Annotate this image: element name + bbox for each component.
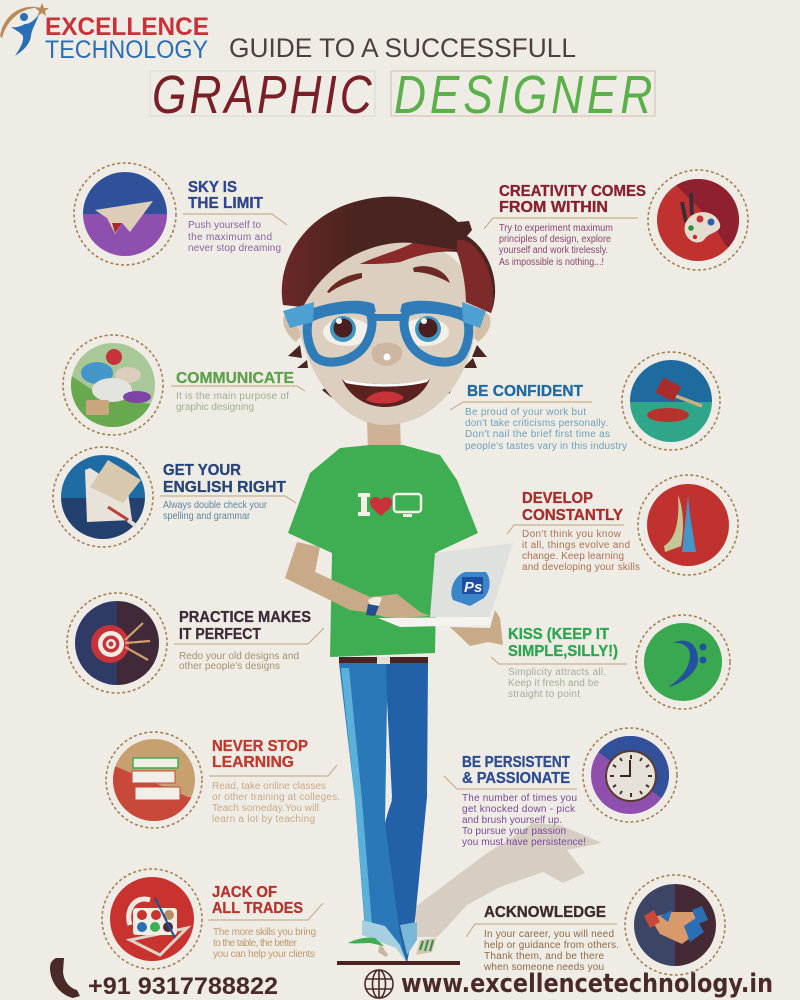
panel: acknowledge: help or guidance from others. — [484, 940, 619, 951]
panel: kiss — [491, 615, 730, 709]
arm and hand — [285, 542, 430, 618]
panel: creativity comes from within — [484, 170, 748, 270]
glasses — [283, 301, 486, 362]
hair side tufts — [288, 345, 487, 398]
panel: kiss: straight to point — [508, 689, 580, 700]
panel: develop constantly: change. Keep learning — [522, 551, 624, 562]
icon: palette and tools — [102, 869, 202, 969]
title — [150, 33, 655, 125]
t-shirt — [288, 445, 478, 657]
shadow of character — [415, 823, 602, 937]
panel: be persistent and passionate — [444, 728, 677, 848]
panel: sky is the limit: THE LIMIT — [188, 195, 263, 212]
panel: be confident: Be proud of your work but — [465, 407, 586, 418]
panel: be persistent and passionate: The number of times you — [462, 793, 577, 804]
panel: acknowledge: Thank them, and be there — [484, 951, 604, 962]
panel: jack of all trades: to the table, the better — [213, 938, 298, 949]
panel: practice makes it perfect: Redo your old designs and — [179, 651, 299, 662]
panel: develop constantly: Don't think you know — [522, 529, 622, 540]
icon: target — [67, 593, 167, 693]
panel: get your english right — [53, 447, 296, 547]
icon: books — [106, 732, 202, 828]
panel: be confident: people's tastes vary in this industry — [465, 441, 627, 452]
icon: gavel — [622, 352, 720, 450]
character — [282, 197, 513, 965]
icon: globe — [365, 970, 393, 998]
panel: sky is the limit: never stop dreaming — [188, 243, 281, 254]
panel: be persistent and passionate: you must have persistence! — [462, 837, 586, 848]
panel: jack of all trades: The more skills you bring — [213, 927, 316, 938]
panel: develop constantly: CONSTANTLY — [522, 507, 623, 524]
sandals — [348, 938, 436, 957]
panel: sky is the limit: SKY IS — [188, 179, 237, 196]
logo — [0, 3, 209, 64]
panel: be confident: don't take criticisms personally. — [465, 418, 608, 429]
title: GUIDE TO A SUCCESSFULL — [229, 33, 576, 63]
panel: never stop learning — [106, 732, 340, 828]
panel: communicate: COMMUNICATE — [176, 370, 294, 387]
panel: jack of all trades: JACK OF — [212, 884, 277, 901]
panel: kiss: Simplicity attracts all. — [508, 667, 606, 678]
panel: develop constantly: it all, things evolve and — [522, 540, 630, 551]
panel: acknowledge: when someone needs you — [483, 962, 604, 973]
icon: clock — [583, 728, 677, 822]
ground bar — [337, 961, 460, 965]
belt — [339, 657, 428, 664]
panel: never stop learning: NEVER STOP — [212, 738, 308, 755]
icon: handshake — [625, 875, 725, 975]
panel: never stop learning: Read, take online classes — [212, 781, 326, 792]
panel: be persistent and passionate: and brush yourself up. — [462, 815, 562, 826]
panel: creativity comes from within: yourself and work tirelessly. — [499, 245, 608, 256]
neck — [367, 420, 401, 450]
panel: communicate: graphic designing — [176, 402, 254, 413]
panel: be confident: BE CONFIDENT — [467, 383, 583, 400]
phone contact: +91 9317788822 — [88, 973, 278, 1000]
icon: paint palette — [648, 170, 748, 270]
panel: be persistent and passionate: & PASSIONATE — [462, 770, 570, 787]
icon: speech bubbles — [63, 335, 163, 435]
icon: bass clef — [636, 615, 730, 709]
ears — [283, 312, 491, 342]
panel: develop constantly — [507, 475, 738, 575]
title: GRAPHIC — [152, 65, 372, 125]
panel: jack of all trades — [102, 869, 323, 969]
panel: never stop learning: or other training at colleges. — [212, 792, 340, 803]
panel: creativity comes from within: CREATIVITY COMES — [499, 183, 646, 200]
panel: jack of all trades: you can help your clients — [213, 949, 315, 960]
panel: kiss: SIMPLE,SILLY!) — [508, 643, 618, 660]
panel: practice makes it perfect: PRACTICE MAKES — [179, 609, 311, 626]
panel: be persistent and passionate: To pursue your passion — [462, 826, 566, 837]
panel: get your english right: Always double check your — [163, 500, 268, 511]
panel: get your english right: GET YOUR — [163, 462, 241, 479]
icon: calligraphy tools — [638, 475, 738, 575]
panel: kiss: Keep it fresh and be — [508, 678, 599, 689]
panel: be persistent and passionate: BE PERSISTENT — [462, 754, 570, 771]
panel: never stop learning: learn a lot by teaching — [212, 814, 315, 825]
panel: sky is the limit: the maximum and — [188, 232, 272, 243]
panel: sky is the limit — [74, 163, 287, 265]
panel: develop constantly: and developing your skills — [522, 562, 640, 573]
icon: paper plane — [74, 163, 176, 265]
panel: acknowledge: ACKNOWLEDGE — [484, 904, 606, 921]
jeans — [339, 663, 428, 963]
panel: acknowledge: In your career, you will need — [484, 929, 614, 940]
panel: jack of all trades: ALL TRADES — [212, 900, 303, 917]
panel: kiss: KISS (KEEP IT — [508, 626, 609, 643]
panel: creativity comes from within: principles of design, explore — [499, 234, 611, 245]
panel: creativity comes from within: Try to experiment maximum — [499, 223, 613, 234]
logo: TECHNOLOGY — [45, 36, 208, 64]
title: DESIGNER — [394, 65, 652, 125]
panel: practice makes it perfect: other people's designs — [179, 661, 280, 672]
tablet: Ps — [464, 579, 482, 596]
hair — [282, 197, 495, 313]
panel: sky is the limit: Push yourself to — [188, 220, 261, 231]
panel: communicate: It is the main purpose of — [176, 391, 289, 402]
hand under tablet — [450, 610, 503, 646]
phone contact — [50, 958, 278, 1000]
panel: practice makes it perfect: IT PERFECT — [179, 626, 261, 643]
panel: never stop learning: LEARNING — [212, 754, 294, 771]
mouth — [342, 378, 430, 407]
panel: be persistent and passionate: get knocked down - pick — [462, 804, 576, 815]
head — [282, 197, 495, 425]
panel: acknowledge — [466, 875, 725, 975]
panel: get your english right: spelling and grammar — [163, 511, 251, 522]
panel: develop constantly: DEVELOP — [522, 490, 593, 507]
panel: be confident — [450, 352, 720, 452]
eyes — [323, 316, 449, 346]
icon: paper and pen — [53, 447, 153, 547]
panel: be confident: Don't nail the brief first time as — [465, 429, 610, 440]
panel: never stop learning: Teach someday.You will — [212, 803, 319, 814]
panel: creativity comes from within: As impossible is nothing...! — [499, 257, 604, 268]
panel: get your english right: ENGLISH RIGHT — [163, 479, 286, 496]
panel: practice makes it perfect — [67, 593, 324, 693]
panel: creativity comes from within: FROM WITHIN — [499, 199, 608, 216]
face — [296, 240, 476, 425]
eyebrows — [327, 266, 450, 293]
nose — [372, 342, 402, 366]
icon: phone — [50, 958, 80, 998]
panel: communicate — [63, 335, 305, 435]
logo: EXCELLENCE — [45, 13, 209, 41]
tablet — [378, 543, 513, 627]
